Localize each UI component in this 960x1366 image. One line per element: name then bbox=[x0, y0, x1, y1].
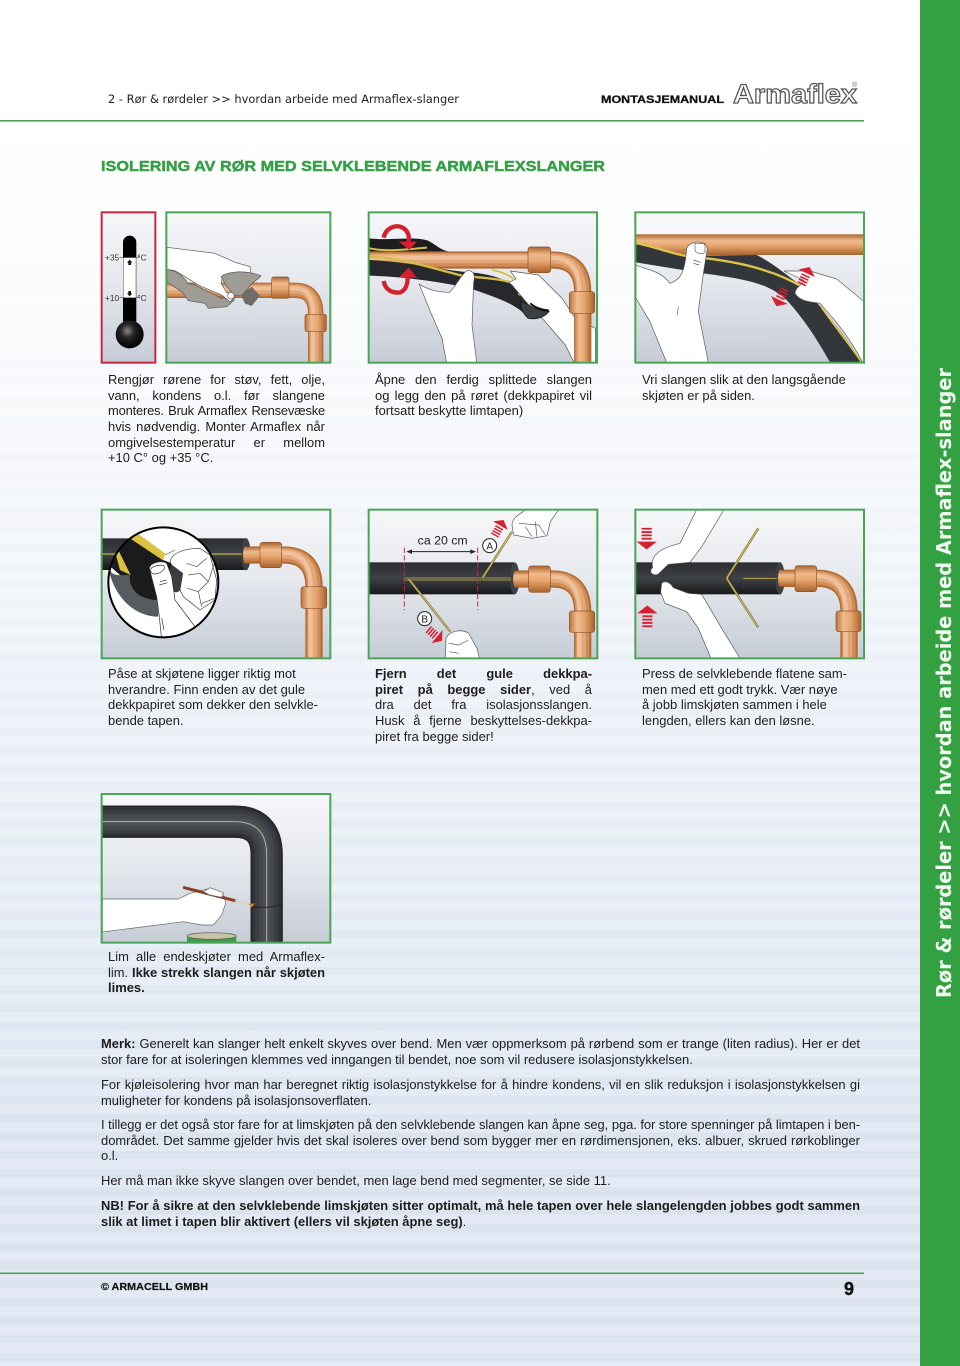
right hand bbox=[509, 271, 595, 365]
text: step 5: Husk å fjerne beskyttelses-dekkpa- bbox=[375, 713, 592, 728]
side band vertical title: Rør & rørdeler >> hvordan arbeide med Armaflex-slanger bbox=[932, 368, 956, 998]
panel: thermometer: °C bbox=[137, 252, 147, 262]
text: step 3: Vri slangen slik at den langsgående bbox=[642, 372, 846, 387]
red rotation arrows bbox=[384, 226, 409, 293]
text: step 4: bende tapen. bbox=[108, 713, 184, 728]
copper pipe bbox=[370, 251, 592, 326]
cloth behind the hand bbox=[167, 269, 234, 308]
left hand bbox=[419, 271, 477, 365]
text: step 2: og legg den på røret (dekkpapiret vil bbox=[375, 388, 592, 403]
collars bbox=[528, 247, 551, 273]
tube end over the hand bbox=[521, 302, 549, 319]
note: cooling insulation bbox=[101, 1077, 860, 1108]
pipe end bbox=[243, 547, 260, 563]
text: step 7 bbox=[108, 949, 325, 995]
dashed marks bbox=[404, 548, 478, 610]
text: step 4 bbox=[108, 666, 318, 728]
note: bends: stor fare for at isoleringen klemmes ved inngangen til bendet, noe som vil redusere isolasjonstykkelsen. bbox=[101, 1052, 693, 1067]
text: step 1 bbox=[108, 372, 325, 465]
brush bbox=[184, 888, 235, 901]
lower hand bbox=[661, 582, 740, 658]
fingers over brush bbox=[203, 888, 223, 897]
vertical pipe in front of the hand bbox=[574, 312, 591, 363]
text: step 1: hvis nødvendig. Monter Armaflex når bbox=[108, 419, 325, 434]
logo: Armaflex: Armaflex bbox=[733, 79, 857, 109]
green side band bbox=[920, 0, 960, 1366]
glue can bbox=[187, 933, 236, 944]
red arrows bbox=[636, 528, 657, 549]
label B: B bbox=[421, 614, 428, 625]
tube bbox=[369, 562, 514, 594]
text: step 4: hverandre. Finn enden av det gule bbox=[108, 682, 305, 697]
note: cooling insulation: muligheter for kondens på isolasjonsoverflaten. bbox=[101, 1093, 371, 1108]
right hand bbox=[784, 271, 864, 362]
text: notes bbox=[101, 1036, 860, 1229]
tube bbox=[102, 538, 247, 570]
text: step 5: Fjern det gule dekkpa- bbox=[375, 666, 592, 681]
copper pipe bbox=[167, 288, 316, 365]
tube bbox=[636, 562, 781, 594]
text: step 6: lengden, ellers kan den løsne. bbox=[642, 713, 815, 728]
text: step 4: Påse at skjøtene ligger riktig mot bbox=[108, 666, 296, 681]
upper tube half bbox=[369, 238, 449, 252]
note: NB: slik at limet i tapen blir aktivert (ellers vil skjøten åpne seg). bbox=[101, 1214, 466, 1229]
collars bbox=[529, 566, 550, 592]
panel: rotate the tube bbox=[635, 212, 864, 363]
lower hand bbox=[445, 631, 479, 658]
text: step 4: dekkpapiret som dekker den selvkle- bbox=[108, 697, 318, 712]
text: step 6 bbox=[642, 666, 847, 728]
hand bbox=[102, 888, 226, 932]
text: step 6: å jobb limskjøten sammen i hele bbox=[642, 697, 827, 712]
note: joint opening: I tillegg er det også stor fare for at limskjøten på den selvklebende slangen kan åpne seg, pga. for store spenninger på limtapen i ben- bbox=[101, 1117, 860, 1132]
dimension arrow bbox=[410, 550, 472, 553]
panel: gluing end joints bbox=[102, 794, 330, 947]
text: step 5: piret fra begge sider! bbox=[375, 729, 494, 744]
copper pipe bbox=[243, 553, 314, 662]
panel: cleaning the pipe bbox=[166, 212, 330, 365]
tube bbox=[636, 244, 862, 362]
collars bbox=[795, 566, 817, 592]
joint line bbox=[251, 904, 283, 907]
page number: 9 bbox=[844, 1279, 854, 1299]
copper pipe bbox=[514, 577, 583, 662]
footer rule bbox=[0, 1272, 864, 1274]
text: step 1: vann, kondens o.l. før slangene bbox=[108, 388, 325, 403]
shaded cloth under pipe bbox=[241, 287, 260, 306]
text: step 5 bbox=[375, 666, 592, 744]
text: step 7: lim. Ikke strekk slangen når skjøten bbox=[108, 965, 325, 980]
hand bbox=[167, 247, 251, 302]
dimension label: ca 20 cm bbox=[418, 534, 468, 548]
text: step 2: fortsatt beskytte limtapen) bbox=[375, 403, 523, 418]
note: joint opening: o.l. bbox=[101, 1148, 118, 1163]
upper hand bbox=[512, 510, 559, 538]
red arrows bbox=[797, 267, 815, 286]
text: step 6: men med ett godt trykk. Vær nøye bbox=[642, 682, 838, 697]
upper hand bbox=[651, 510, 724, 575]
label A: A bbox=[486, 541, 493, 552]
top header rule bbox=[0, 120, 864, 122]
magnifier circle bbox=[107, 527, 218, 643]
panel: magnified tape end bbox=[102, 510, 330, 662]
panel: thermometer bbox=[102, 212, 155, 363]
text: step 5: piret på begge sider, ved å bbox=[375, 682, 592, 697]
text: step 7: limes. bbox=[108, 980, 145, 995]
label A bbox=[483, 539, 497, 553]
yellow strips bbox=[727, 528, 758, 628]
panel: press the surfaces together bbox=[635, 510, 864, 662]
text: step 3 bbox=[642, 372, 846, 403]
yellow tape bbox=[636, 242, 802, 287]
note: NB bbox=[101, 1198, 860, 1229]
note: segments: Her må man ikke skyve slangen over bendet, men lage bend med segmenter, se side 11. bbox=[101, 1173, 611, 1188]
pipe end bbox=[513, 571, 530, 587]
red arrows bbox=[487, 516, 511, 540]
panel: open the slit tube bbox=[369, 212, 597, 365]
yellow strips bbox=[409, 532, 512, 632]
label B bbox=[418, 612, 432, 626]
footer copyright: © ARMACELL GMBH bbox=[101, 1281, 208, 1293]
yellow tape bbox=[369, 248, 427, 250]
header manual label: MONTASJEMANUAL bbox=[601, 94, 724, 106]
text: step 1: +10 C° og +35 °C. bbox=[108, 450, 213, 465]
lower tube half bbox=[370, 260, 530, 319]
pipe end bbox=[778, 570, 795, 587]
panel: remove yellow backing paper bbox=[369, 510, 597, 662]
note: joint opening: dområdet. Det samme gjelder hvis det skal isoleres over bend som bygger mer en rørdimensjonen, eks. albuer, skrued rørkoblinger bbox=[101, 1133, 860, 1148]
main title: ISOLERING AV RØR MED SELVKLEBENDE ARMAFLEXSLANGER bbox=[101, 159, 605, 175]
copper pipe bbox=[778, 576, 849, 662]
text: step 1: omgivelsestemperatur er mellom bbox=[108, 435, 325, 450]
note: NB: NB! For å sikre at den selvklebende limskjøten sitter optimalt, må hele tapen over hele slangelengden jobbes godt sammen bbox=[101, 1198, 860, 1213]
text: step 2 bbox=[375, 372, 592, 418]
cloth in the fist bbox=[221, 272, 261, 296]
logo: Armaflex: ® bbox=[852, 81, 858, 89]
panel: thermometer: +10 bbox=[105, 293, 119, 303]
text: step 3: skjøten er på siden. bbox=[642, 388, 755, 403]
copper pipe bbox=[636, 234, 864, 255]
white band behind pipe bbox=[706, 255, 863, 256]
panel: thermometer: °C bbox=[137, 293, 147, 303]
text: step 1: Rengjør rørene for støv, fett, olje, bbox=[108, 372, 325, 387]
note: bends bbox=[101, 1036, 860, 1067]
text: step 2: Åpne den ferdig splittede slangen bbox=[375, 372, 592, 387]
text: step 5: dra det fra isolasjonsslangen. bbox=[375, 697, 592, 712]
collars bbox=[260, 542, 282, 568]
thumb and hand bbox=[149, 562, 195, 636]
tube with bend bbox=[102, 822, 267, 947]
panel: thermometer: +35 bbox=[105, 252, 119, 262]
note: cooling insulation: For kjøleisolering hvor man har beregnet riktig isolasjonstykkelse for å hindre kondens, vil en slik reduksjon i isolasjonstykkelsen gi bbox=[101, 1077, 860, 1092]
left hand bbox=[636, 242, 708, 363]
text: step 1: monteres. Bruk Armaflex Rensevæske bbox=[108, 403, 325, 418]
note: bends: Merk: Generelt kan slanger helt enkelt skyves over bend. Men vær oppmerksom på rørbend som er trange (liten radius). Her er det bbox=[101, 1036, 860, 1051]
header breadcrumb: 2 - Rør & rørdeler >> hvordan arbeide med Armaflex-slanger bbox=[108, 92, 459, 106]
note: joint opening bbox=[101, 1117, 860, 1163]
pipe collars bbox=[272, 277, 289, 298]
text: step 6: Press de selvklebende flatene sam- bbox=[642, 666, 847, 681]
text: step 7: Lim alle endeskjøter med Armaflex- bbox=[108, 949, 325, 964]
